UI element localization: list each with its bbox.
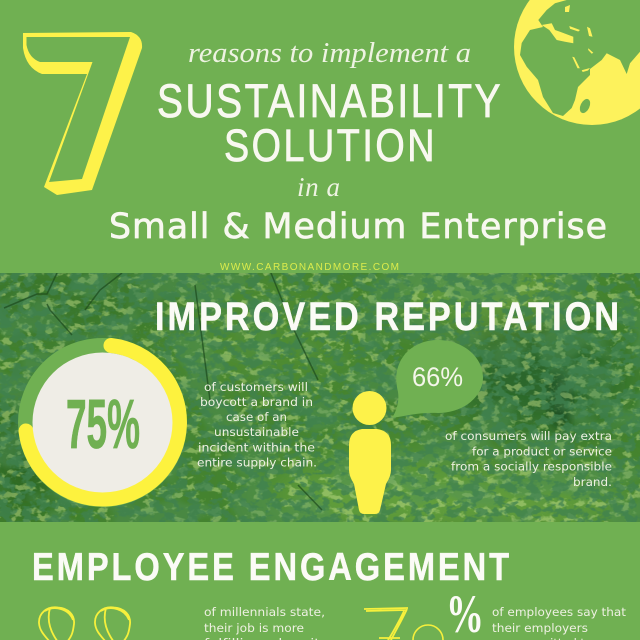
website link: WWW.CARBONANDMORE.COM	[220, 262, 399, 273]
chart: 75 percent donut	[26, 346, 180, 500]
text: millennials	[204, 605, 325, 640]
text: consumers pay extra	[445, 429, 612, 489]
text: customers boycott: of customers will	[204, 380, 308, 394]
number: hand-drawn seventy percent	[364, 584, 484, 640]
text: customers boycott: boycott a brand in	[200, 395, 313, 409]
speech bubble	[392, 340, 483, 418]
heading: employee engagement: EMPLOYEE ENGAGEMENT	[32, 546, 512, 589]
title line: sustainability: SUSTAINABILITY	[157, 74, 503, 127]
text: customers boycott	[197, 380, 317, 470]
hand-drawn zero	[413, 625, 443, 640]
title	[109, 38, 608, 247]
icon: person with speech bubble	[349, 340, 483, 514]
illustration: big number seven	[23, 32, 142, 195]
text: millennials: their job is more	[204, 621, 304, 635]
title line: solution: SOLUTION	[224, 120, 437, 171]
text: customers boycott: entire supply chain.	[197, 456, 317, 470]
icon: hand-drawn balloons	[39, 607, 130, 640]
text: consumers pay extra: from a socially responsible	[451, 460, 612, 474]
bubble value: 66%	[412, 362, 463, 392]
text: employees: of employees say that	[492, 605, 627, 619]
title line: small and medium enterprise: Small & Medium Enterprise	[109, 207, 608, 247]
title line: in a: in a	[297, 172, 340, 202]
text: consumers pay extra: of consumers will pay extra	[445, 429, 612, 443]
icon: globe	[514, 0, 640, 125]
donut value: 75%	[66, 385, 140, 463]
text: consumers pay extra: brand.	[573, 475, 612, 489]
text: employees	[492, 605, 627, 640]
panel: forest photo	[0, 265, 640, 527]
text: millennials: of millennials state,	[204, 605, 325, 619]
text: employees: their employers	[492, 621, 588, 635]
hand-drawn seven	[364, 608, 408, 640]
title line: reasons to implement a: reasons to implement a	[188, 38, 471, 69]
text: consumers pay extra: for a product or service	[472, 444, 612, 458]
icon: globe seas	[542, 5, 593, 72]
text: customers boycott: unsustainable	[214, 425, 299, 439]
person head	[352, 391, 386, 425]
person body	[349, 429, 391, 514]
text: customers boycott: case of an	[226, 410, 287, 424]
text: customers boycott: incident within the	[198, 440, 315, 454]
